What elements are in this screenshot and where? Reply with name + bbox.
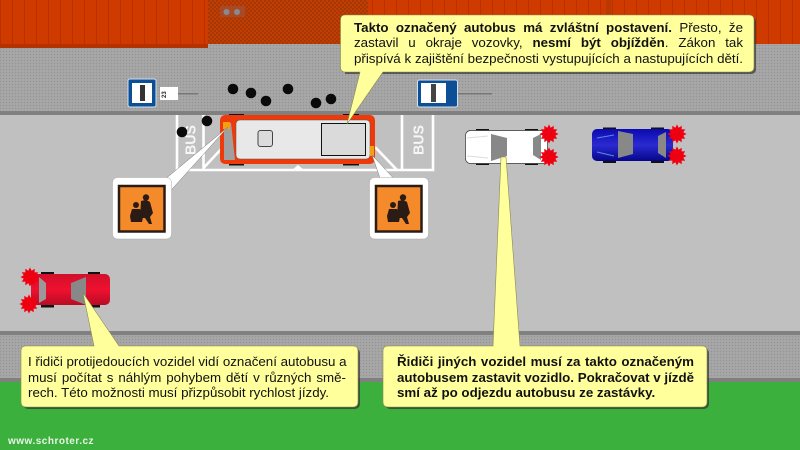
bus stop sign left: 23 — [162, 91, 168, 98]
road — [0, 111, 800, 331]
roof: right building — [368, 0, 800, 44]
blue car — [592, 124, 686, 166]
callout: other drivers must stop: smí až po odjezdu autobusu ze zastávky. — [397, 385, 655, 400]
school bus sign left — [112, 178, 172, 239]
school bus sign right — [370, 178, 428, 239]
children on the sidewalk — [228, 84, 336, 108]
callout: top, special status of the bus: přispívá k zajištění bezpečnosti vystupujících a nastupujících dětí. — [354, 51, 743, 66]
children crossing the road — [177, 116, 212, 137]
callout: top, special status of the bus: Takto označený autobus má zvláštní postavení. Přesto, že — [354, 20, 743, 35]
pointer: front school-bus sign — [372, 155, 397, 182]
grass — [0, 382, 800, 450]
bus bay markings: BUS — [410, 125, 428, 155]
roof: left building — [0, 0, 208, 48]
roof: tiled section with skylight — [208, 0, 368, 44]
callout: oncoming drivers: I řidiči protijedoucích vozidel vidí označení autobusu a — [28, 354, 347, 369]
red car — [20, 268, 110, 314]
bus bay markings: BUS — [182, 125, 200, 155]
bus — [220, 114, 375, 166]
lower sidewalk — [0, 331, 800, 382]
pointer: rear school-bus sign — [164, 127, 228, 198]
bus stop sign left — [128, 79, 198, 107]
bus bay markings — [177, 115, 433, 170]
callout: oncoming drivers: rech. Této možnosti musí přizpůsobit rychlost jízdy. — [28, 385, 329, 400]
bus stop sign right — [418, 80, 492, 107]
callout: other drivers must stop — [382, 156, 709, 409]
callout: top, special status of the bus — [340, 14, 756, 124]
website credit: www.schroter.cz — [7, 436, 94, 447]
callout: oncoming drivers — [20, 293, 360, 409]
white car — [466, 124, 558, 166]
upper sidewalk — [0, 44, 800, 111]
callout: oncoming drivers: musí počítat s náhlým pohybem dětí v různých smě- — [28, 370, 346, 385]
callout: other drivers must stop: Řidiči jiných vozidel musí za takto označeným — [397, 354, 694, 369]
callout: other drivers must stop: autobusem zastavit vozidlo. Pokračovat v jízdě — [397, 370, 694, 385]
callout: top, special status of the bus: zastavil u okraje vozovky, nesmí být objížděn. Zákon tak — [354, 35, 743, 50]
